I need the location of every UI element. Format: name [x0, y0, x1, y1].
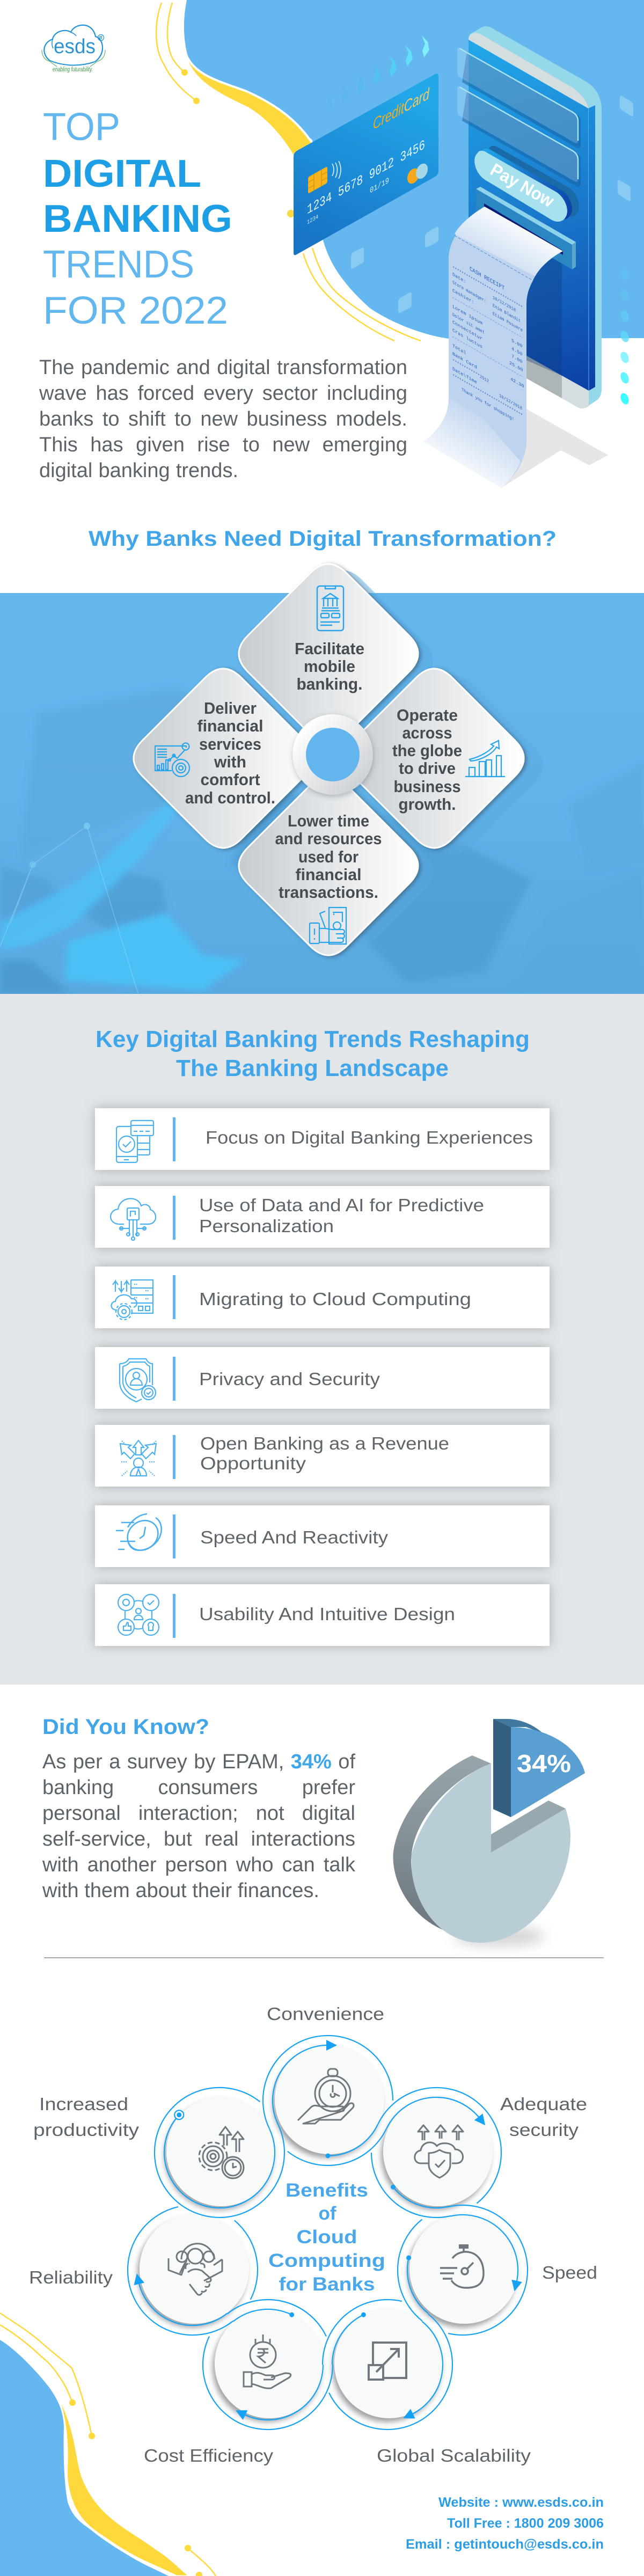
receipt text: Cras luctus: [452, 327, 482, 350]
credit card: 1234 5678 9012 3456: [307, 137, 425, 218]
diamond: financial services: and control.: [185, 788, 275, 807]
icon: adequate security: [415, 2125, 463, 2178]
diamond: global growth: across: [402, 723, 452, 742]
heading: why banks: Why Banks Need Digital Transformation?: [89, 527, 557, 551]
icon: fast clock: [116, 1514, 164, 1556]
center heading: for Banks: [279, 2274, 375, 2295]
heading: key trends: Key Digital Banking Trends Reshaping: [96, 1026, 530, 1052]
diamond: lower time: [239, 776, 418, 955]
title: TOP: [43, 106, 120, 149]
heading: key trends: The Banking Landscape: [176, 1055, 449, 1081]
icon: person with arrows: [120, 1440, 156, 1476]
benefit labels: Adequate: [500, 2094, 587, 2114]
did you know paragraph: personal interaction; not digital: [42, 1802, 355, 1825]
icon: speed: [440, 2244, 484, 2288]
trend card: privacy: [95, 1347, 550, 1409]
diamond: financial services: [134, 669, 313, 848]
ring arcs: security: [345, 2061, 528, 2244]
receipt text: Lorem ipsum: [452, 304, 482, 326]
trend card: digital experiences: Focus on Digital Banking Experiences: [206, 1128, 533, 1147]
logo: [42, 25, 105, 73]
receipt text: Consectetur: [452, 319, 482, 342]
icon: cloud chip: [111, 1198, 156, 1240]
did you know paragraph: with another person who can talk: [42, 1854, 355, 1876]
credit card: [294, 74, 438, 255]
benefit labels: Global Scalability: [377, 2446, 531, 2465]
icon: phone and card: [116, 1121, 153, 1162]
phone input fields: [457, 48, 581, 187]
contact details: [406, 2495, 604, 2552]
diamond: financial services: comfort: [201, 770, 260, 789]
credit card: 01/19: [370, 176, 389, 196]
receipt text: Total: [452, 343, 466, 356]
trend card: privacy: Privacy and Security: [199, 1369, 380, 1389]
contact details: Toll Free : 1800 209 3006: [447, 2516, 604, 2531]
receipt text: Etiam Posuere: [493, 311, 523, 333]
diamond: mobile banking: Facilitate: [295, 639, 364, 658]
trend card: open banking: [95, 1425, 550, 1487]
receipt text: Enim Blandit: [493, 303, 521, 324]
trend card: data and AI: Use of Data and AI for Predictive: [199, 1195, 484, 1215]
band background: [0, 593, 644, 994]
diamond: lower time: Lower time: [288, 811, 369, 830]
credit card: 1234: [307, 213, 318, 226]
title: DIGITAL: [43, 152, 201, 195]
diamond: global growth: business: [394, 777, 460, 796]
benefit labels: Convenience: [267, 2004, 384, 2024]
ring arcs: scalability: [301, 2278, 474, 2451]
receipt text: Date\Time: [452, 366, 477, 385]
benefit labels: Cost Efficiency: [144, 2446, 274, 2465]
icon: cash in hand: [310, 908, 346, 944]
icon: growth chart: [465, 741, 505, 777]
did you know paragraph: self-service, but real interactions: [42, 1828, 355, 1850]
trend card: open banking: Opportunity: [200, 1453, 306, 1473]
benefit labels: Reliability: [29, 2267, 113, 2287]
pie slice: [493, 1719, 585, 1817]
discs: [140, 2045, 519, 2418]
did you know heading: Did You Know?: [42, 1715, 209, 1739]
diamond: global growth: Operate: [397, 706, 458, 724]
intro paragraph: banks to shift to new business models.: [39, 408, 407, 430]
credit card: CreditCard: [373, 84, 430, 134]
trend card: speed: [95, 1505, 550, 1567]
ring arcs: productivity: [155, 2088, 284, 2218]
benefit labels: productivity: [33, 2120, 140, 2140]
icon: convenience: [298, 2069, 354, 2124]
title: BANKING: [43, 197, 232, 240]
trend card: usability: [95, 1584, 550, 1646]
bottom-left decoration: [0, 2313, 216, 2576]
diamond: lower time: financial: [295, 865, 362, 884]
did you know paragraph: banking consumers prefer: [42, 1776, 355, 1799]
title: TRENDS: [43, 243, 194, 286]
icon: reliability: [169, 2244, 222, 2295]
icon: usability nodes: [118, 1594, 159, 1635]
did you know paragraph: [42, 1751, 355, 1902]
title: [43, 106, 232, 332]
center heading: Cloud: [296, 2227, 357, 2248]
receipt text: 10/12/2018: [493, 295, 516, 313]
center heading: [268, 2180, 385, 2295]
diamond: lower time: used for: [298, 847, 358, 866]
ring arcs: cost: [181, 2278, 355, 2451]
diamond: global growth: to drive: [399, 759, 456, 778]
trend card: cloud computing: Migrating to Cloud Computing: [199, 1289, 471, 1309]
center ring: [292, 714, 373, 795]
ring arcs: reliability: [115, 2200, 258, 2348]
logo: enabling futurability.: [53, 67, 93, 73]
icon: shield person: [120, 1359, 156, 1402]
receipt text: Cashier:: [452, 288, 474, 305]
heading: key trends: [96, 1026, 530, 1081]
title: FOR 2022: [43, 289, 228, 332]
trend card: speed: Speed And Reactivity: [200, 1527, 389, 1547]
intro paragraph: [39, 356, 407, 482]
pay now button: [474, 146, 579, 222]
diamond: global growth: the globe: [392, 741, 462, 760]
receipt text: Date:: [452, 272, 466, 284]
pie slice: 34%: [517, 1750, 571, 1777]
intro paragraph: This has given rise to new emerging: [39, 434, 407, 456]
receipt text: Thank you for shopping!: [462, 386, 514, 422]
section: key trends background: [0, 994, 644, 1685]
logo: esds: [54, 35, 96, 58]
floor shadow: [483, 409, 608, 488]
center heading: of: [318, 2203, 336, 2224]
center heading: Benefits: [286, 2180, 368, 2201]
did you know paragraph: As per a survey by EPAM, 34% of: [42, 1751, 355, 1773]
center heading: Computing: [268, 2250, 385, 2271]
pay now button: Pay Now: [487, 159, 558, 211]
trend card: digital experiences: [95, 1108, 550, 1170]
contact details: Email : getintouch@esds.co.in: [406, 2537, 604, 2552]
vertical dots: [619, 268, 631, 406]
did you know paragraph: with them about their finances.: [42, 1879, 319, 1902]
receipt text: 4.50: [511, 346, 522, 357]
icon: server cloud gear: [111, 1280, 153, 1320]
benefits ring: [29, 2004, 597, 2465]
receipt text: 42.30: [510, 376, 524, 390]
yellow swoosh top: [156, 3, 421, 341]
trend card: open banking: Open Banking as a Revenue: [200, 1433, 449, 1453]
icon: analytics board: [155, 743, 189, 777]
trend card: data and AI: Personalization: [199, 1216, 334, 1236]
diamonds panel: [134, 564, 543, 962]
intro paragraph: digital banking trends.: [39, 459, 238, 482]
receipt text: *******************************: [452, 373, 523, 419]
benefit labels: Increased: [39, 2094, 128, 2114]
icon: global scalability: [369, 2343, 406, 2380]
card slot: [476, 187, 576, 269]
diamond: lower time: and resources: [275, 829, 382, 848]
diamond: global growth: [345, 669, 524, 848]
phone: [457, 26, 602, 408]
receipt text: [452, 255, 524, 428]
receipt text: ************2512: [452, 358, 489, 384]
benefit labels: security: [509, 2120, 579, 2140]
receipt text: Store manadger:: [452, 280, 486, 304]
receipt text: 7.00: [511, 353, 522, 365]
receipt: [424, 207, 563, 488]
floating squares: [351, 96, 633, 313]
chevrons: [325, 35, 429, 113]
benefit labels: [29, 2004, 597, 2465]
diamond: mobile banking: [239, 564, 418, 743]
trend card: data and AI: [95, 1186, 550, 1248]
diamond: financial services: Deliver: [204, 699, 257, 718]
trend card: cloud computing: [95, 1267, 550, 1328]
icon: increased productivity: [199, 2127, 244, 2178]
diamond: financial services: with: [214, 752, 246, 771]
receipt text: *******************************: [452, 265, 523, 311]
diamond: mobile banking: banking.: [296, 675, 363, 693]
diamond: financial services: services: [199, 735, 261, 753]
receipt text: CASH RECEIPT: [470, 265, 504, 292]
pie chart 34 percent: [393, 1719, 585, 1946]
icon: cost efficiency: [244, 2334, 291, 2388]
diamond: global growth: growth.: [398, 795, 456, 814]
contact details: Website : www.esds.co.in: [438, 2495, 604, 2510]
receipt text: 25.00: [509, 360, 523, 373]
diamond ghost shadows: [254, 570, 543, 962]
trend card: usability: Usability And Intuitive Design: [199, 1604, 455, 1624]
diamond: lower time: transactions.: [279, 883, 378, 902]
intro paragraph: The pandemic and digital transformation: [39, 356, 407, 379]
ring arcs: convenience: [263, 2036, 393, 2165]
icon: mobile bank: [317, 586, 343, 631]
logo: R: [99, 35, 103, 40]
diamond: mobile banking: mobile: [304, 657, 355, 676]
benefit labels: Speed: [542, 2263, 597, 2282]
hero background blob: [184, 0, 644, 339]
receipt text: Dolor sit amet: [452, 312, 485, 335]
receipt text: 10/12/2018: [499, 393, 522, 412]
diamond: financial services: financial: [197, 716, 263, 735]
receipt text: 5.00: [511, 338, 522, 349]
ring arcs: speed: [385, 2192, 540, 2348]
divider: [44, 1957, 604, 1958]
intro paragraph: wave has forced every sector including: [39, 382, 407, 405]
receipt text: Bank Card: [452, 351, 477, 370]
